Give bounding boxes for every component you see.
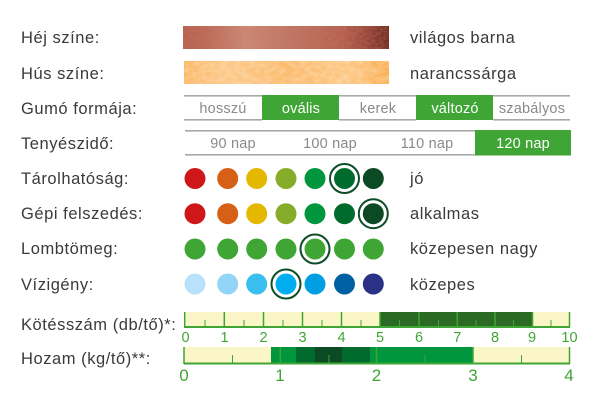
tuber count scale 0-10: 9: [528, 330, 536, 346]
tuber count scale 0-10: 4: [337, 330, 346, 346]
yield scale 0-4: 2: [372, 366, 381, 385]
tuber count scale 0-10: 1: [220, 330, 229, 346]
yield scale 0-4: 0: [179, 366, 189, 385]
row label: Tárolhatóság: Tárolhatóság:: [21, 170, 129, 188]
yield scale 0-4: 1: [275, 366, 285, 385]
growing period selector: 100 nap: [303, 136, 357, 152]
tuber count scale 0-10: 7: [453, 330, 461, 346]
tuber shape selector: ovális: [282, 101, 320, 117]
row label: Vízigény: Vízigény:: [21, 276, 94, 294]
row label: Kötésszám: Kötésszám (db/tő)*:: [21, 316, 176, 334]
tuber count scale 0-10: 6: [415, 330, 423, 346]
water demand dots: [184, 270, 384, 298]
growing period selector: 120 nap: [496, 136, 550, 152]
tuber count scale 0-10: 0: [181, 330, 190, 346]
tuber shape selector: szabályos: [499, 101, 565, 117]
mechanical harvest dots: [184, 199, 388, 228]
growing period selector: 110 nap: [401, 136, 453, 152]
tuber shape selector: változó: [431, 101, 479, 117]
yield scale 0-4: [179, 347, 574, 385]
tuber shape selector: [184, 95, 570, 121]
tuber count scale 0-10: 10: [561, 330, 578, 346]
row label: Gépi felszedés: Gépi felszedés:: [21, 205, 143, 223]
foliage mass dots: [184, 234, 384, 264]
tuber count scale 0-10: 5: [376, 330, 384, 346]
row label: Hús színe: Hús színe:: [21, 65, 104, 83]
tuber count scale 0-10: 3: [298, 330, 307, 346]
value: narancssárga: narancssárga: [410, 65, 517, 83]
value: világos barna: világos barna: [410, 29, 516, 47]
value: közepesen nagy: közepesen nagy: [410, 240, 538, 258]
row label: Hozam: Hozam (kg/tő)**:: [21, 350, 151, 368]
skin colour swatch: [183, 26, 389, 49]
value: közepes: közepes: [410, 276, 475, 294]
growing period selector: 90 nap: [210, 136, 256, 152]
storability dots: [184, 164, 384, 193]
tuber shape selector: kerek: [360, 101, 397, 117]
tuber count scale 0-10: [181, 312, 578, 346]
tuber count scale 0-10: 2: [259, 330, 268, 346]
flesh colour swatch: [184, 61, 389, 84]
yield scale 0-4: 3: [468, 366, 478, 385]
value: alkalmas: alkalmas: [410, 205, 480, 223]
row label: Tenyészidő: Tenyészidő:: [21, 135, 114, 153]
tuber count scale 0-10: 8: [491, 330, 499, 346]
row label: Lombtömeg: Lombtömeg:: [21, 240, 118, 258]
value: jó: jó: [409, 170, 424, 188]
tuber shape selector: hosszú: [199, 101, 247, 117]
growing period selector: [185, 130, 571, 156]
row label: Gumó formája: Gumó formája:: [21, 100, 137, 118]
yield scale 0-4: 4: [564, 366, 574, 385]
row label: Héj színe: Héj színe:: [21, 29, 100, 47]
